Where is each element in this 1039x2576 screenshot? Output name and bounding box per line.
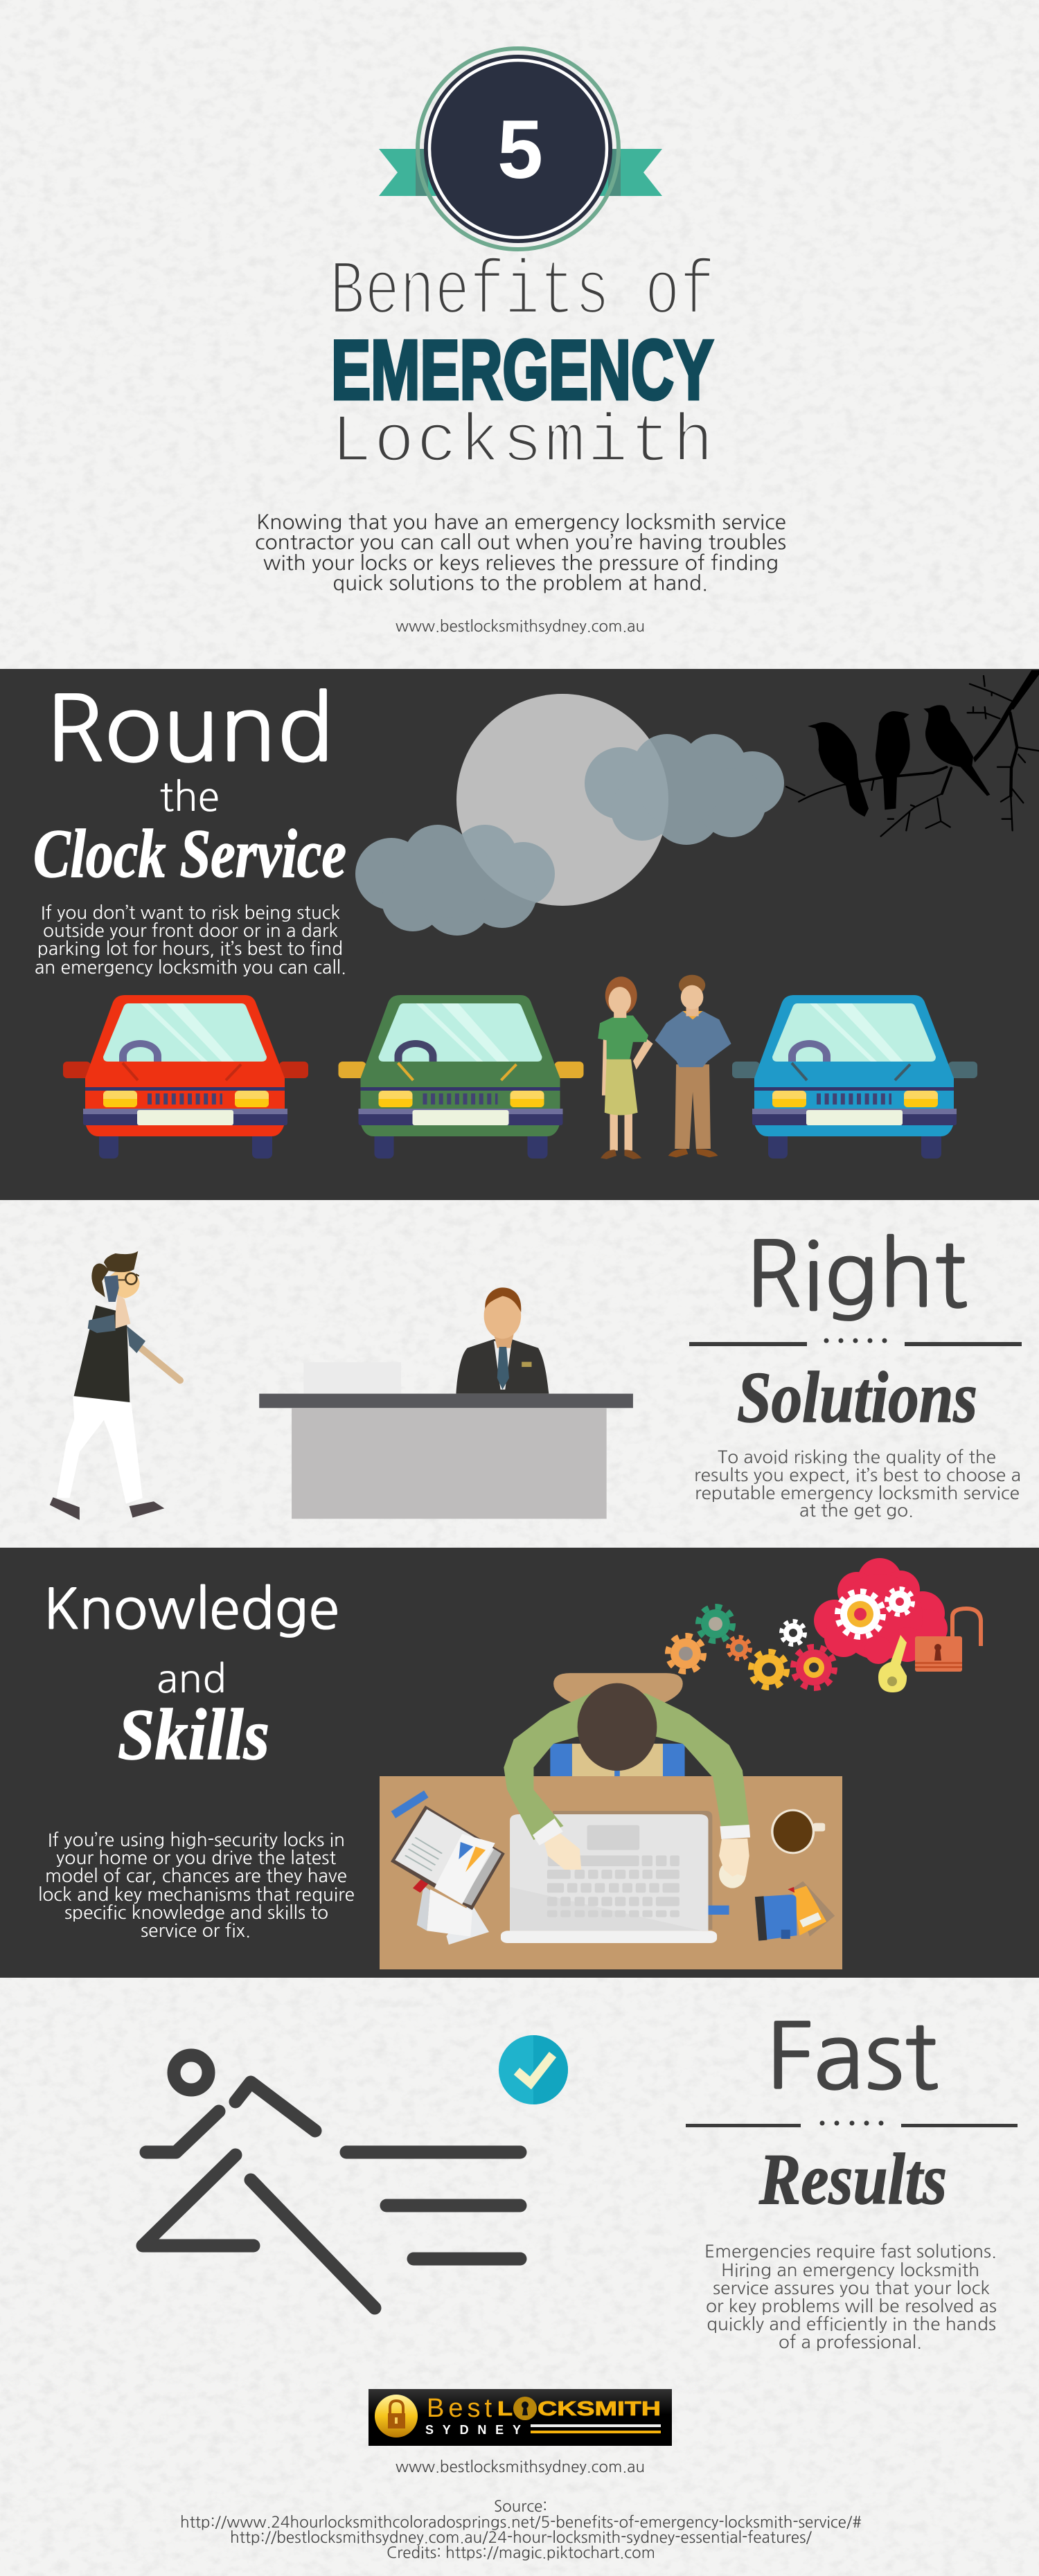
footer sources and credits: Source:	[494, 2499, 547, 2514]
intro text: with your locks or keys relieves the pressure of finding	[263, 553, 779, 573]
intro text: contractor you can call out when you’re having troubles	[255, 533, 786, 553]
icon: man	[655, 975, 731, 1157]
illustration: man walking on the phone	[50, 1251, 180, 1520]
footer sources and credits: http://bestlocksmithsydney.com.au/24-hour-locksmith-sydney-essential-features/	[230, 2530, 812, 2546]
icon: left cloud	[355, 825, 555, 936]
text block: right solutions: at the get go.	[799, 1502, 914, 1519]
icon: woman	[598, 976, 653, 1159]
icon: birds on branch	[786, 670, 1039, 837]
footer logo: Best Locksmith Sydney: SYDNEY	[425, 2423, 521, 2437]
heading: Round: Round	[46, 683, 334, 774]
title: Benefits of: Benefits of	[330, 249, 715, 337]
icon: moon	[456, 694, 668, 906]
footer sources and credits: http://www.24hourlocksmithcoloradosprings.net/5-benefits-of-emergency-locksmith-service/#	[180, 2515, 862, 2530]
text block: fast results: Hiring an emergency locksmith	[721, 2262, 979, 2279]
footer logo: Best Locksmith Sydney: CKSMITH	[538, 2398, 661, 2420]
heading: Skills: Skills	[118, 1694, 269, 1775]
icon: right cloud	[585, 734, 784, 845]
text block: knowledge: model of car, chances are they have	[45, 1867, 347, 1885]
text block: knowledge: service or fix.	[141, 1922, 251, 1940]
panel: knowledge and skills	[0, 1548, 1039, 1978]
icon: number 5 badge with ribbon	[379, 48, 662, 249]
text block: round the clock: an emergency locksmith you can call.	[35, 958, 346, 976]
text block: knowledge: lock and key mechanisms that require	[38, 1886, 355, 1904]
heading: Solutions: Solutions	[737, 1357, 977, 1438]
footer logo: Best Locksmith Sydney	[368, 2389, 672, 2446]
title: EMERGENCY: EMERGENCY	[331, 323, 713, 417]
text block: round the clock: If you don’t want to risk being stuck	[41, 904, 340, 922]
panel: right solutions	[50, 1229, 1022, 1520]
text block: fast results	[704, 2243, 997, 2351]
heading: Fast: Fast	[766, 2011, 938, 2102]
intro text: quick solutions to the problem at hand.	[332, 573, 708, 593]
text block: round the clock	[35, 904, 346, 976]
panel: fast results	[143, 2011, 1018, 2351]
illustration: person working at desk from above	[380, 1673, 842, 1969]
title: Locksmith: Locksmith	[331, 404, 713, 481]
text block: fast results: service assures you that your lock	[713, 2280, 990, 2297]
intro text: Knowing that you have an emergency locksmith service	[256, 512, 786, 533]
text block: fast results: or key problems will be resolved as	[706, 2298, 997, 2315]
website url: www.bestlocksmithsydney.com.au	[396, 619, 645, 634]
text block: round the clock: parking lot for hours, it’s best to find	[37, 940, 343, 958]
icon: number 5 badge with ribbon: 5	[497, 103, 543, 196]
icon: red car	[63, 995, 308, 1159]
footer sources and credits: Credits: https://magic.piktochart.com	[387, 2546, 655, 2561]
heading: Results: Results	[758, 2138, 947, 2219]
text block: fast results: of a professional.	[779, 2334, 922, 2351]
panel: header	[255, 48, 786, 634]
icon: green car	[338, 995, 583, 1159]
panel: round the clock service	[0, 669, 1039, 1200]
icon: running figure	[143, 2055, 520, 2308]
intro text	[255, 512, 786, 593]
heading: the: the	[159, 777, 220, 817]
text block: knowledge: specific knowledge and skills to	[64, 1904, 328, 1922]
icon: check badge	[499, 2035, 568, 2104]
footer sources and credits	[180, 2499, 862, 2561]
text block: knowledge	[38, 1831, 355, 1940]
heading: Knowledge: Knowledge	[43, 1582, 339, 1637]
text block: knowledge: your home or you drive the latest	[56, 1849, 337, 1867]
text block: knowledge: If you’re using high-security locks in	[48, 1831, 345, 1849]
icon: gears, cloud, key and padlock	[668, 1558, 981, 1692]
text block: round the clock: outside your front door or in a dark	[43, 922, 338, 940]
heading: Clock Service: Clock Service	[33, 815, 346, 892]
divider with dots	[689, 1338, 1022, 1346]
text block: fast results: quickly and efficiently in the hands	[707, 2316, 996, 2333]
icon: blue car	[732, 995, 977, 1159]
text block: right solutions: reputable emergency locksmith service	[695, 1485, 1020, 1502]
divider with dots	[686, 2120, 1018, 2127]
text block: right solutions	[694, 1449, 1021, 1519]
text block: right solutions: To avoid risking the quality of the	[718, 1449, 996, 1466]
footer logo: Best Locksmith Sydney: Best	[427, 2394, 492, 2423]
text block: fast results: Emergencies require fast solutions.	[704, 2243, 997, 2260]
heading: Right: Right	[745, 1229, 967, 1321]
illustration: reception desk with receptionist	[259, 1287, 633, 1519]
heading: and: and	[157, 1660, 227, 1699]
text block: right solutions: results you expect, it’s best to choose a	[694, 1467, 1021, 1484]
footer website url: www.bestlocksmithsydney.com.au	[396, 2460, 645, 2475]
footer logo: Best Locksmith Sydney: L	[497, 2398, 513, 2420]
